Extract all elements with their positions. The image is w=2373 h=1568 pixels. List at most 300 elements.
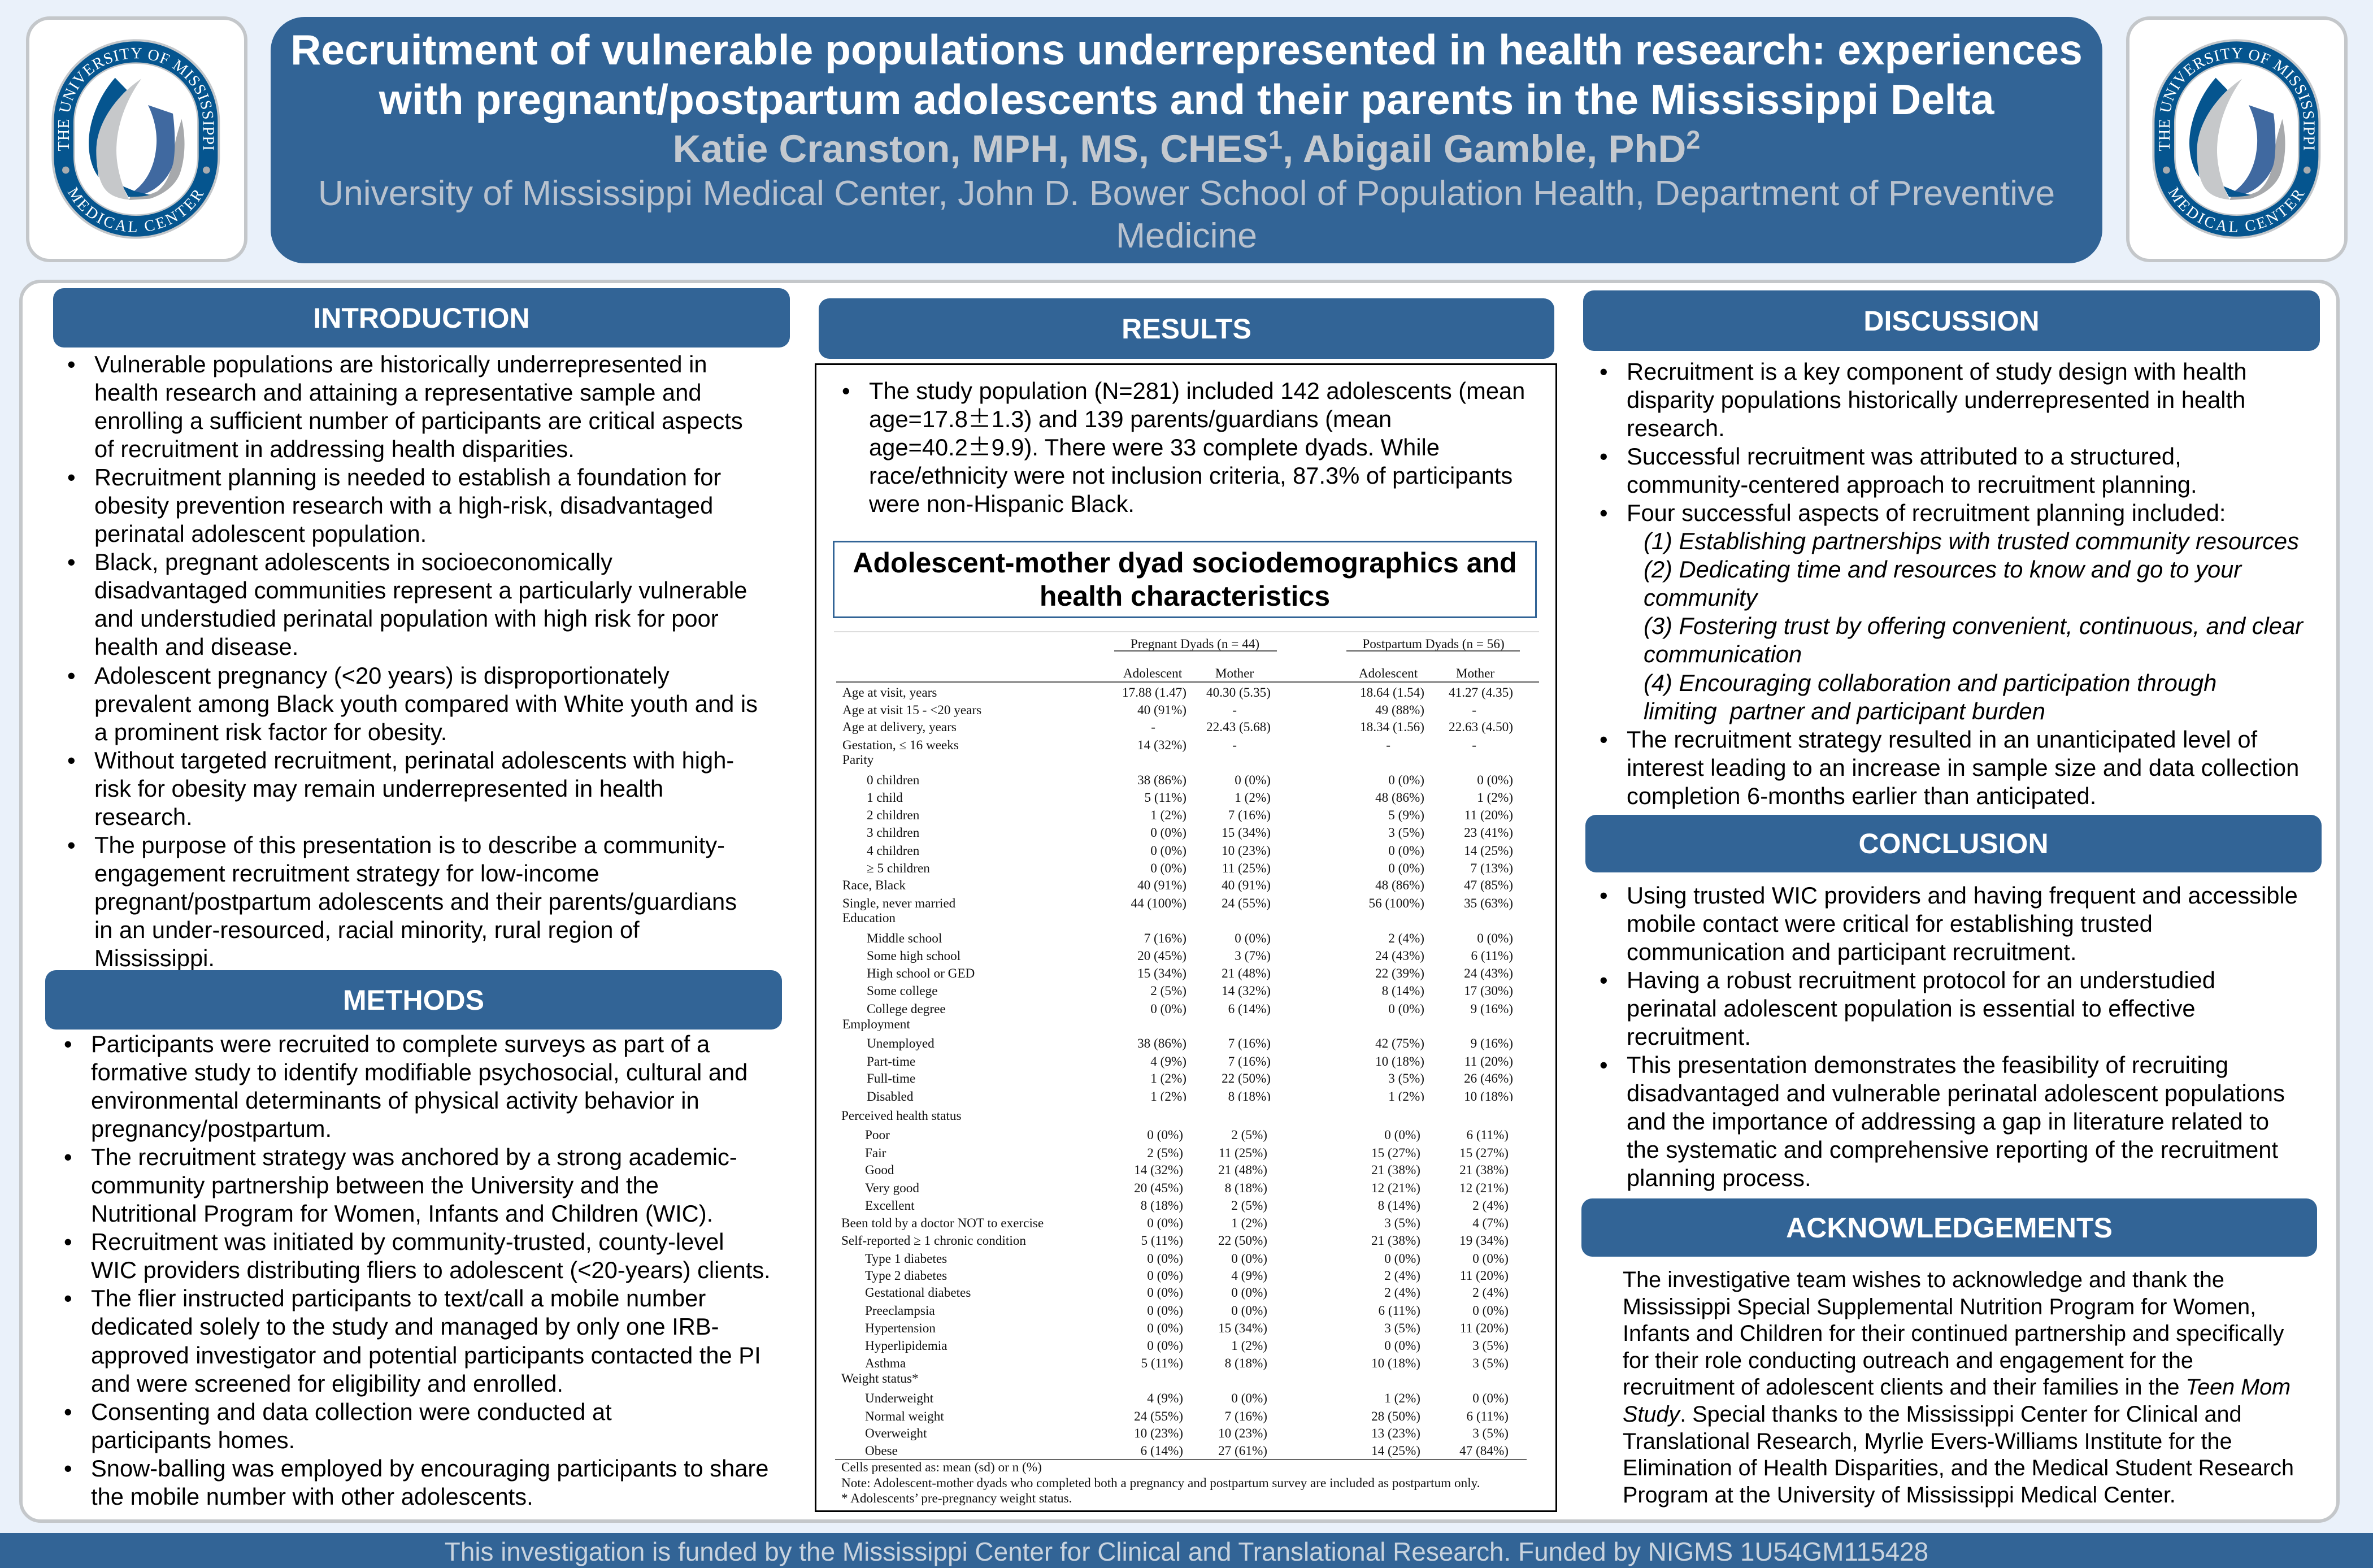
table: dyad sociodemographics: 15 (34%) <box>1222 826 1271 840</box>
table: dyad sociodemographics: 0 (0%) <box>1231 1285 1267 1300</box>
table: dyad sociodemographics: 1 (2%) <box>1231 1216 1267 1231</box>
title: with pregnant/postpartum adolescents and their parents in the Mississippi Delta <box>379 76 1994 123</box>
table: dyad sociodemographics: 1 (2%) <box>1384 1391 1420 1406</box>
table: dyad sociodemographics: 40 (91%) <box>1137 703 1186 718</box>
table: dyad sociodemographics: 6 (14%) <box>1141 1444 1183 1458</box>
table: dyad sociodemographics: 5 (9%) <box>1388 808 1424 823</box>
text block: introduction bullets: disadvantaged communities represent a particularly vulnerable <box>94 577 747 603</box>
text block: acknowledgements: recruitment of adolescent clients and their families in the Teen Mom <box>1623 1375 2291 1400</box>
text block: discussion bullets: Recruitment is a key component of study design with health <box>1627 358 2247 385</box>
panel: results <box>815 363 1557 1512</box>
text block: acknowledgements: Mississippi Special Supplemental Nutrition Program for Women, <box>1623 1295 2256 1319</box>
table: dyad sociodemographics: 56 (100%) <box>1368 896 1424 911</box>
table: dyad sociodemographics: 48 (86%) <box>1375 878 1424 893</box>
text block: methods bullets: The recruitment strategy was anchored by a strong academic- <box>91 1144 737 1170</box>
table: dyad sociodemographics: 8 (18%) <box>1228 1089 1271 1104</box>
heading: discussion <box>1583 290 2320 351</box>
text block: introduction bullets: Without targeted recruitment, perinatal adolescents with high- <box>94 747 734 774</box>
text block: introduction bullets: Black, pregnant adolescents in socioeconomically <box>94 549 612 575</box>
panel: conclusion: • <box>1600 967 1608 993</box>
text block: introduction bullets: perinatal adolescent population. <box>94 520 427 547</box>
table: dyad sociodemographics: 8 (14%) <box>1378 1198 1420 1213</box>
table: dyad sociodemographics: 1 (2%) <box>1150 1089 1186 1104</box>
text block: conclusion bullets: Having a robust recruitment protocol for an understudied <box>1627 967 2215 993</box>
panel: introduction: • <box>67 464 76 490</box>
text block: introduction bullets: research. <box>94 803 193 830</box>
table: dyad sociodemographics: 10 (18%) <box>1375 1054 1424 1069</box>
footer: funding statement <box>0 1533 2373 1568</box>
text block: acknowledgements <box>1623 1267 2294 1508</box>
table: dyad sociodemographics: Postpartum Dyads (n = 56) <box>1362 637 1505 651</box>
panel: results: • <box>842 377 850 404</box>
table: dyad sociodemographics: 0 (0%) <box>1150 861 1186 876</box>
table: dyad sociodemographics: 0 (0%) <box>1231 1304 1267 1318</box>
text block: discussion bullets: Four successful aspects of recruitment planning included: <box>1627 499 2226 526</box>
table: dyad sociodemographics: Overweight <box>865 1426 927 1441</box>
table: dyad sociodemographics: 0 (0%) <box>1231 1391 1267 1406</box>
icon: university seal right <box>2152 39 2321 239</box>
table: dyad sociodemographics: 3 children <box>867 826 920 840</box>
table: dyad sociodemographics: 0 (0%) <box>1384 1128 1420 1143</box>
panel: methods: • <box>64 1285 72 1311</box>
text block: methods bullets: Participants were recruited to complete surveys as part of a <box>91 1031 710 1057</box>
table: dyad sociodemographics: Perceived health status <box>841 1109 961 1123</box>
table: dyad sociodemographics: Some college <box>867 984 938 998</box>
text block: discussion bullets: community <box>1644 584 1757 611</box>
table: dyad sociodemographics: Been told by a doctor NOT to exercise <box>841 1216 1044 1231</box>
text block: introduction bullets: health and disease. <box>94 633 298 660</box>
table: dyad sociodemographics: 0 (0%) <box>1147 1216 1183 1231</box>
table: dyad sociodemographics: Single, never married <box>842 896 956 911</box>
table: dyad sociodemographics: Age at visit, years <box>842 685 937 700</box>
text block: discussion bullets: (1) Establishing partnerships with trusted community resources <box>1644 528 2299 554</box>
heading: results: RESULTS <box>1122 313 1251 345</box>
table: dyad sociodemographics: 14 (32%) <box>1222 984 1271 998</box>
heading: methods <box>45 970 782 1030</box>
table: dyad sociodemographics: Cells presented as: mean (sd) or n (%) <box>841 1460 1042 1475</box>
table: dyad sociodemographics: 14 (32%) <box>1137 738 1186 753</box>
logo card: right <box>2126 16 2348 262</box>
text block: introduction bullets: prevalent among Black youth compared with White youth and is <box>94 690 758 717</box>
text block: discussion bullets: Successful recruitment was attributed to a structured, <box>1627 443 2181 470</box>
table: dyad sociodemographics: 8 (18%) <box>1225 1181 1267 1196</box>
panel: methods: • <box>64 1455 72 1482</box>
table title: Adolescent-mother dyad sociodemographics and <box>853 547 1517 579</box>
table: dyad sociodemographics: 18.34 (1.56) <box>1360 720 1424 735</box>
table: dyad sociodemographics: 15 (27%) <box>1371 1146 1420 1161</box>
text block: methods bullets: WIC providers distributing fliers to adolescent (<20-years) clients. <box>91 1257 771 1283</box>
text block: methods bullets: the mobile number with other adolescents. <box>91 1483 533 1510</box>
affiliation: University of Mississippi Medical Center, John D. Bower School of Population Health, Department of Preventive <box>318 173 2055 213</box>
table: dyad sociodemographics: 1 (2%) <box>1235 790 1271 805</box>
table: dyad sociodemographics: 49 (88%) <box>1375 703 1424 718</box>
table: dyad sociodemographics: 0 (0%) <box>1147 1321 1183 1336</box>
text block: methods bullets: Consenting and data collection were conducted at <box>91 1398 612 1425</box>
table: dyad sociodemographics: Fair <box>865 1146 886 1161</box>
title <box>290 26 2083 123</box>
table: dyad sociodemographics: Underweight <box>865 1391 934 1406</box>
table: dyad sociodemographics: 8 (14%) <box>1382 984 1424 998</box>
table: dyad sociodemographics <box>834 631 1539 1506</box>
table: dyad sociodemographics: 21 (38%) <box>1371 1163 1420 1178</box>
table: dyad sociodemographics: Type 1 diabetes <box>865 1252 947 1266</box>
table: dyad sociodemographics: 0 (0%) <box>1150 844 1186 858</box>
table: dyad sociodemographics: 1 (2%) <box>1477 790 1513 805</box>
table: dyad sociodemographics: 9 (16%) <box>1471 1002 1513 1017</box>
text block: conclusion bullets: planning process. <box>1627 1165 1811 1191</box>
table: dyad sociodemographics: 23 (41%) <box>1464 826 1513 840</box>
header banner <box>271 17 2102 263</box>
table: dyad sociodemographics: 0 (0%) <box>1388 773 1424 788</box>
table: dyad sociodemographics: Education <box>842 911 896 926</box>
table: dyad sociodemographics: 22 (50%) <box>1222 1071 1271 1086</box>
table: dyad sociodemographics: 3 (7%) <box>1235 949 1271 963</box>
text block: discussion bullets: community-centered approach to recruitment planning. <box>1627 471 2197 498</box>
icon: university seal left <box>51 39 220 239</box>
text block: conclusion bullets: disadvantaged and vulnerable perinatal adolescent populations <box>1627 1080 2285 1106</box>
text block: study population <box>842 377 1525 517</box>
table: dyad sociodemographics: Adolescent <box>1359 666 1418 681</box>
panel: conclusion <box>1585 815 2322 1191</box>
title: Recruitment of vulnerable populations underrepresented in health research: experiences <box>290 26 2083 73</box>
table: dyad sociodemographics: Hypertension <box>865 1321 936 1336</box>
table: dyad sociodemographics: 0 (0%) <box>1472 1304 1509 1318</box>
table: dyad sociodemographics: 8 (18%) <box>1141 1198 1183 1213</box>
table: dyad sociodemographics: 5 (11%) <box>1141 1356 1183 1371</box>
table: dyad sociodemographics: 0 (0%) <box>1235 931 1271 946</box>
table: dyad sociodemographics: 0 (0%) <box>1147 1252 1183 1266</box>
heading: discussion: DISCUSSION <box>1863 305 2040 337</box>
table: dyad sociodemographics: 18.64 (1.54) <box>1360 685 1424 700</box>
text block: introduction bullets: of recruitment in addressing health disparities. <box>94 436 575 462</box>
text block: introduction bullets: Adolescent pregnancy (<20 years) is disproportionately <box>94 662 670 689</box>
text block: conclusion bullets <box>1600 882 2298 1191</box>
table: dyad sociodemographics: Part-time <box>867 1054 915 1069</box>
table: dyad sociodemographics: 3 (5%) <box>1472 1426 1509 1441</box>
table: dyad sociodemographics: 11 (25%) <box>1219 1146 1267 1161</box>
table: dyad sociodemographics: Adolescent <box>1123 666 1183 681</box>
table: dyad sociodemographics: Obese <box>865 1444 898 1458</box>
table: dyad sociodemographics: 3 (5%) <box>1388 1071 1424 1086</box>
panel: discussion <box>1583 290 2320 809</box>
table: dyad sociodemographics: Mother <box>1456 666 1494 681</box>
table: dyad sociodemographics: 24 (55%) <box>1134 1409 1183 1424</box>
table: dyad sociodemographics: 3 (5%) <box>1388 826 1424 840</box>
table: dyad sociodemographics: 42 (75%) <box>1375 1036 1424 1051</box>
text block: introduction bullets: risk for obesity may remain underrepresented in health <box>94 775 663 802</box>
table: dyad sociodemographics: 22.63 (4.50) <box>1449 720 1513 735</box>
table: dyad sociodemographics: Mother <box>1215 666 1254 681</box>
heading: results <box>819 298 1554 359</box>
table: dyad sociodemographics: 12 (21%) <box>1371 1181 1420 1196</box>
table: dyad sociodemographics: 0 (0%) <box>1147 1304 1183 1318</box>
text block: introduction bullets: health research and attaining a representative sample and <box>94 379 702 406</box>
text block: methods bullets: pregnancy/postpartum. <box>91 1115 332 1142</box>
text block: acknowledgements: The investigative team wishes to acknowledge and thank the <box>1623 1267 2224 1292</box>
text block: discussion bullets: (3) Fostering trust by offering convenient, continuous, and clear <box>1644 613 2303 639</box>
table: dyad sociodemographics: Good <box>865 1163 894 1178</box>
table: dyad sociodemographics: Gestational diabetes <box>865 1285 971 1300</box>
table: dyad sociodemographics: 15 (34%) <box>1137 966 1186 981</box>
table: dyad sociodemographics: 0 (0%) <box>1388 844 1424 858</box>
table: dyad sociodemographics: 5 (11%) <box>1141 1233 1183 1248</box>
table: dyad sociodemographics: 6 (11%) <box>1467 1409 1509 1424</box>
table: dyad sociodemographics: 0 (0%) <box>1477 931 1513 946</box>
table: dyad sociodemographics: 5 (11%) <box>1145 790 1186 805</box>
text block: discussion bullets: communication <box>1644 641 1802 667</box>
table: dyad sociodemographics: 4 (9%) <box>1231 1269 1267 1283</box>
text block: conclusion bullets: Using trusted WIC providers and having frequent and accessible <box>1627 882 2298 909</box>
table: dyad sociodemographics: Some high school <box>867 949 960 963</box>
table: dyad sociodemographics: Hyperlipidemia <box>865 1339 948 1353</box>
text block: introduction bullets: enrolling a sufficient number of participants are critical aspects <box>94 407 743 434</box>
text block: methods bullets: dedicated solely to the study and managed by only one IRB- <box>91 1313 719 1340</box>
text block: acknowledgements: Elimination of Health Disparities, and the Medical Student Research <box>1623 1456 2294 1480</box>
table: dyad sociodemographics: 0 (0%) <box>1147 1128 1183 1143</box>
text block: conclusion bullets: communication and participant recruitment. <box>1627 939 2076 965</box>
table: dyad sociodemographics: Asthma <box>865 1356 906 1371</box>
logo card: left <box>26 16 247 262</box>
table: dyad sociodemographics: 12 (21%) <box>1459 1181 1509 1196</box>
table: dyad sociodemographics: Very good <box>865 1181 919 1196</box>
table: dyad sociodemographics: 2 (5%) <box>1150 984 1186 998</box>
table: dyad sociodemographics: 3 (5%) <box>1384 1216 1420 1231</box>
text block: study population: race/ethnicity were not inclusion criteria, 87.3% of participants <box>869 462 1513 489</box>
table: dyad sociodemographics: 0 (0%) <box>1388 861 1424 876</box>
table: dyad sociodemographics: 11 (20%) <box>1460 1321 1509 1336</box>
panel: introduction: • <box>67 351 76 377</box>
table: dyad sociodemographics: 0 (0%) <box>1147 1269 1183 1283</box>
icon: university seal right: THE UNIVERSITY OF MISSISSIPPI <box>2159 47 2314 151</box>
table: dyad sociodemographics: 1 (2%) <box>1231 1339 1267 1353</box>
table: dyad sociodemographics: 7 (16%) <box>1144 931 1186 946</box>
panel: methods: • <box>64 1144 72 1170</box>
table: dyad sociodemographics: - <box>1151 720 1155 735</box>
table: dyad sociodemographics: 11 (20%) <box>1464 1054 1513 1069</box>
table: dyad sociodemographics: 0 (0%) <box>1388 1002 1424 1017</box>
panel: introduction <box>53 288 790 971</box>
table: dyad sociodemographics: 22 (50%) <box>1218 1233 1267 1248</box>
table: dyad sociodemographics: 11 (20%) <box>1464 808 1513 823</box>
text block: acknowledgements: Infants and Children for their continued partnership and specifically <box>1623 1321 2284 1346</box>
affiliation: Medicine <box>1116 216 1257 255</box>
text block: methods bullets: The flier instructed participants to text/call a mobile number <box>91 1285 706 1311</box>
table: dyad sociodemographics: 2 (4%) <box>1384 1285 1420 1300</box>
table: dyad sociodemographics: ≥ 5 children <box>867 861 930 876</box>
text block: conclusion bullets: and the importance of addressing a gap in literature related to <box>1627 1108 2269 1135</box>
table: dyad sociodemographics: 38 (86%) <box>1137 773 1186 788</box>
table: dyad sociodemographics: Unemployed <box>867 1036 935 1051</box>
text block: study population: were non-Hispanic Black. <box>869 490 1135 517</box>
table: dyad sociodemographics: Pregnant Dyads (n = 44) <box>1131 637 1259 651</box>
table: dyad sociodemographics: 0 (0%) <box>1150 1002 1186 1017</box>
table: dyad sociodemographics: 10 (23%) <box>1222 844 1271 858</box>
table: dyad sociodemographics: 1 (2%) <box>1388 1089 1424 1104</box>
text block: introduction bullets: Mississippi. <box>94 945 215 971</box>
authors: Katie Cranston, MPH, MS, CHES1, Abigail Gamble, PhD2 <box>673 125 1700 171</box>
table: dyad sociodemographics: Normal weight <box>865 1409 944 1424</box>
panel: acknowledgements <box>1581 1198 2317 1508</box>
text block: acknowledgements: Translational Research, Myrlie Evers-Williams Institute for the <box>1623 1429 2232 1454</box>
table: dyad sociodemographics: 19 (34%) <box>1459 1233 1509 1248</box>
table: dyad sociodemographics: 10 (18%) <box>1371 1356 1420 1371</box>
table: dyad sociodemographics: 0 (0%) <box>1384 1339 1420 1353</box>
text block: introduction bullets: pregnant/postpartum adolescents and their parents/guardians <box>94 888 737 915</box>
table: dyad sociodemographics: 6 (11%) <box>1471 949 1513 963</box>
main content panel <box>19 280 2340 1523</box>
table: dyad sociodemographics: Age at delivery, years <box>842 720 957 735</box>
table: dyad sociodemographics: 40.30 (5.35) <box>1206 685 1271 700</box>
table: dyad sociodemographics: 14 (25%) <box>1371 1444 1420 1458</box>
table: dyad sociodemographics: 4 (9%) <box>1150 1054 1186 1069</box>
text block: methods bullets: participants homes. <box>91 1427 295 1453</box>
table: dyad sociodemographics: 0 (0%) <box>1472 1391 1509 1406</box>
table: dyad sociodemographics: - <box>1386 738 1390 753</box>
table: dyad sociodemographics: 22 (39%) <box>1375 966 1424 981</box>
table: dyad sociodemographics: * Adolescents’ pre-pregnancy weight status. <box>841 1491 1072 1506</box>
table: dyad sociodemographics: 0 (0%) <box>1147 1285 1183 1300</box>
table: dyad sociodemographics: 6 (14%) <box>1228 1002 1271 1017</box>
panel: introduction: • <box>67 747 76 774</box>
table: dyad sociodemographics: 47 (84%) <box>1459 1444 1509 1458</box>
table: dyad sociodemographics: 44 (100%) <box>1131 896 1186 911</box>
table: dyad sociodemographics: 11 (20%) <box>1460 1269 1509 1283</box>
text block: introduction bullets: Recruitment planning is needed to establish a foundation for <box>94 464 721 490</box>
table: dyad sociodemographics: 10 (23%) <box>1134 1426 1183 1441</box>
panel: discussion: • <box>1600 358 1608 385</box>
text block: methods bullets: Nutritional Program for Women, Infants and Children (WIC). <box>91 1200 713 1227</box>
text block: conclusion bullets: recruitment. <box>1627 1023 1751 1050</box>
table: dyad sociodemographics: Self-reported ≥ 1 chronic condition <box>841 1233 1026 1248</box>
table: dyad sociodemographics: 11 (25%) <box>1222 861 1271 876</box>
table: dyad sociodemographics: 7 (13%) <box>1471 861 1513 876</box>
text block: methods bullets: approved investigator and potential participants contacted the PI <box>91 1342 761 1369</box>
table: dyad sociodemographics: 14 (25%) <box>1464 844 1513 858</box>
text block: introduction bullets <box>67 351 758 971</box>
table: dyad sociodemographics: 0 (0%) <box>1472 1252 1509 1266</box>
table: dyad sociodemographics: Age at visit 15 - <20 years <box>842 703 981 718</box>
text block: acknowledgements: for their role conducting outreach and engagement for the <box>1623 1348 2193 1373</box>
table: dyad sociodemographics: 40 (91%) <box>1222 878 1271 893</box>
table: dyad sociodemographics: 2 (4%) <box>1384 1269 1420 1283</box>
table title <box>833 541 1537 618</box>
table: dyad sociodemographics: 10 (23%) <box>1218 1426 1267 1441</box>
panel: introduction: • <box>67 549 76 575</box>
table: dyad sociodemographics: Disabled <box>867 1089 914 1104</box>
text block: study population: The study population (N=281) included 142 adolescents (mean <box>869 377 1525 404</box>
text block: acknowledgements: Program at the University of Mississippi Medical Center. <box>1623 1483 2176 1508</box>
heading: introduction <box>53 288 790 348</box>
panel: methods: • <box>64 1228 72 1255</box>
table: dyad sociodemographics: 41.27 (4.35) <box>1449 685 1513 700</box>
text block: discussion bullets: disparity populations historically underrepresented in health <box>1627 386 2245 413</box>
table: dyad sociodemographics: Parity <box>842 753 874 767</box>
table: dyad sociodemographics: 4 children <box>867 844 920 858</box>
table: dyad sociodemographics: 13 (23%) <box>1371 1426 1420 1441</box>
text block: methods bullets: Recruitment was initiated by community-trusted, county-level <box>91 1228 724 1255</box>
text block: discussion bullets: limiting partner and participant burden <box>1644 698 2045 724</box>
table: dyad sociodemographics: 0 (0%) <box>1384 1252 1420 1266</box>
table: dyad sociodemographics: 7 (16%) <box>1228 808 1271 823</box>
text block: introduction bullets: The purpose of this presentation is to describe a community- <box>94 832 725 858</box>
text block: discussion bullets: completion 6-months earlier than anticipated. <box>1627 783 2096 809</box>
table: dyad sociodemographics: 21 (38%) <box>1459 1163 1509 1178</box>
table: dyad sociodemographics: 1 (2%) <box>1150 1071 1186 1086</box>
table: dyad sociodemographics: 4 (9%) <box>1147 1391 1183 1406</box>
heading: acknowledgements: ACKNOWLEDGEMENTS <box>1786 1211 2113 1243</box>
table: dyad sociodemographics: 0 children <box>867 773 920 788</box>
table: dyad sociodemographics: 0 (0%) <box>1235 773 1271 788</box>
table: dyad sociodemographics: 24 (55%) <box>1222 896 1271 911</box>
table: dyad sociodemographics: 0 (0%) <box>1477 773 1513 788</box>
table: dyad sociodemographics: Note: Adolescent-mother dyads who completed both a pregnancy and postpartum survey are included as postpartum only. <box>841 1476 1480 1491</box>
table: dyad sociodemographics: - <box>1472 703 1476 718</box>
table: dyad sociodemographics: 0 (0%) <box>1150 826 1186 840</box>
heading: conclusion <box>1585 815 2322 872</box>
icon: university seal right: MEDICAL CENTER <box>2168 186 2305 232</box>
table: dyad sociodemographics: 17 (30%) <box>1464 984 1513 998</box>
panel: discussion: • <box>1600 726 1608 753</box>
panel: methods <box>45 970 782 1510</box>
table: dyad sociodemographics: 15 (34%) <box>1218 1321 1267 1336</box>
footer: funding statement: This investigation is funded by the Mississippi Center for Clinical and Translational Research. Funded by NIGMS 1U54GM115428 <box>445 1537 1928 1566</box>
text block: methods bullets: and were screened for eligibility and enrolled. <box>91 1370 563 1397</box>
text block: discussion bullets: research. <box>1627 415 1725 441</box>
table: dyad sociodemographics: Full-time <box>867 1071 915 1086</box>
panel: methods: • <box>64 1031 72 1057</box>
table: dyad sociodemographics: - <box>1232 703 1237 718</box>
table: dyad sociodemographics: 22.43 (5.68) <box>1206 720 1271 735</box>
table: dyad sociodemographics: Excellent <box>865 1198 915 1213</box>
icon: university seal left: MEDICAL CENTER <box>68 186 204 232</box>
table: dyad sociodemographics: 0 (0%) <box>1147 1339 1183 1353</box>
text block: acknowledgements: Study. Special thanks to the Mississippi Center for Clinical and <box>1623 1402 2242 1427</box>
table: dyad sociodemographics: 15 (27%) <box>1459 1146 1509 1161</box>
table: dyad sociodemographics: 21 (48%) <box>1218 1163 1267 1178</box>
text block: study population: age=17.8±1.3) and 139 parents/guardians (mean <box>869 401 1392 435</box>
table: dyad sociodemographics: Race, Black <box>842 878 906 893</box>
table: dyad sociodemographics: 2 (4%) <box>1388 931 1424 946</box>
table: dyad sociodemographics: 8 (18%) <box>1225 1356 1267 1371</box>
table: dyad sociodemographics: 7 (16%) <box>1228 1036 1271 1051</box>
panel: discussion: • <box>1600 443 1608 470</box>
table: dyad sociodemographics: 20 (45%) <box>1134 1181 1183 1196</box>
table: dyad sociodemographics: 4 (7%) <box>1472 1216 1509 1231</box>
heading: acknowledgements <box>1581 1198 2317 1257</box>
table: dyad sociodemographics: Middle school <box>867 931 942 946</box>
table: dyad sociodemographics: 2 (5%) <box>1147 1146 1183 1161</box>
table: dyad sociodemographics: 7 (16%) <box>1228 1054 1271 1069</box>
panel: methods: • <box>64 1398 72 1425</box>
text block: introduction bullets: engagement recruitment strategy for low-income <box>94 860 599 887</box>
table: dyad sociodemographics: 14 (32%) <box>1134 1163 1183 1178</box>
table: dyad sociodemographics: Employment <box>842 1017 910 1032</box>
text block: introduction bullets: a prominent risk factor for obesity. <box>94 719 447 745</box>
text block: methods bullets: community partnership between the University and the <box>91 1172 659 1198</box>
table: dyad sociodemographics: Type 2 diabetes <box>865 1269 947 1283</box>
table: dyad sociodemographics: 21 (48%) <box>1222 966 1271 981</box>
table: dyad sociodemographics: 2 (5%) <box>1231 1198 1267 1213</box>
affiliation <box>318 173 2055 255</box>
table: dyad sociodemographics: 1 (2%) <box>1150 808 1186 823</box>
table: dyad sociodemographics: 20 (45%) <box>1137 949 1186 963</box>
table: dyad sociodemographics: 26 (46%) <box>1464 1071 1513 1086</box>
text block: introduction bullets: obesity prevention research with a high-risk, disadvantaged <box>94 492 713 519</box>
panel: conclusion: • <box>1600 1052 1608 1078</box>
text block: methods bullets: Snow-balling was employed by encouraging participants to share <box>91 1455 768 1482</box>
table: dyad sociodemographics: 6 (11%) <box>1467 1128 1509 1143</box>
table: dyad sociodemographics: 1 child <box>867 790 903 805</box>
